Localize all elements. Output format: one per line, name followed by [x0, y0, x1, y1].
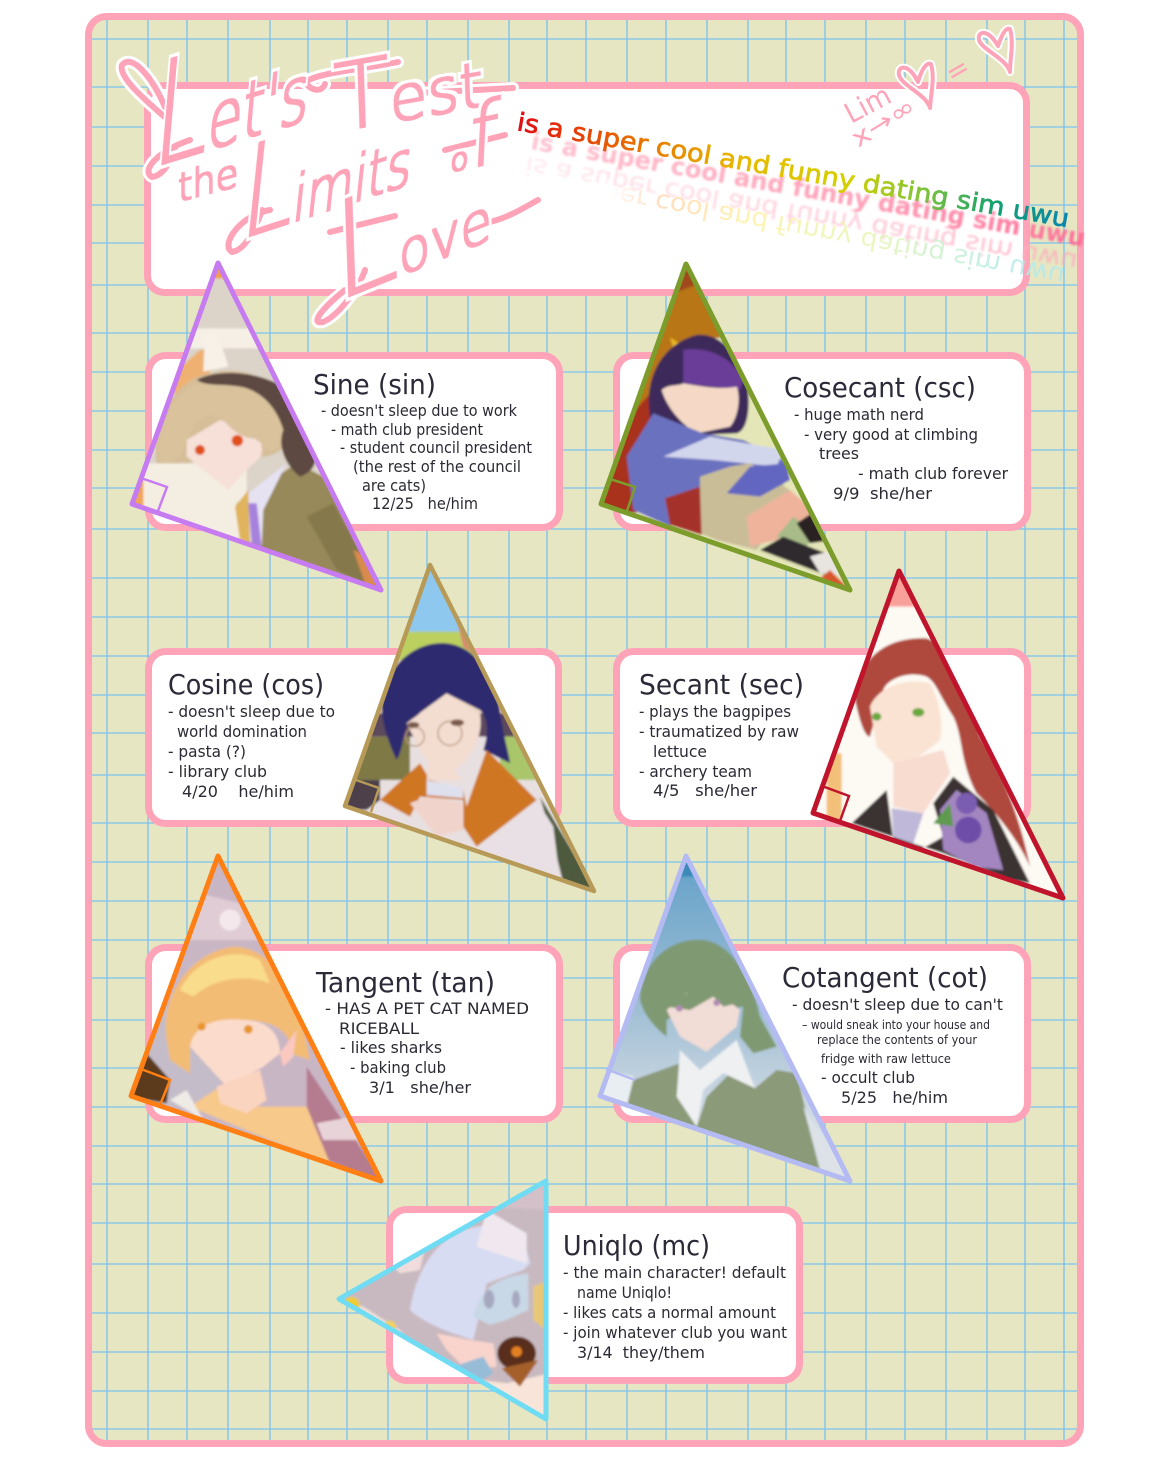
cosine text: - pasta (?) — [168, 742, 246, 761]
cotangent text: - doesn't sleep due to can't — [792, 995, 1003, 1014]
cotangent text: Cotangent (cot) — [782, 961, 988, 994]
card background — [148, 948, 560, 1120]
cotangent text: fridge with raw lettuce — [821, 1052, 951, 1066]
cosine text — [168, 668, 335, 801]
tangent text: - HAS A PET CAT NAMED — [325, 999, 529, 1018]
tangent text: Tangent (tan) — [315, 966, 495, 999]
title word: Let's: Let's — [147, 0, 319, 202]
portrait triangle: uniqlo — [336, 1178, 548, 1422]
cosine text: world domination — [177, 722, 307, 741]
secant text: Secant (sec) — [639, 668, 804, 701]
subtitle rainbow text: is a super cool and funny dating sim uwu — [515, 107, 1071, 233]
icon: heart left — [899, 64, 933, 108]
tangent text: - baking club — [350, 1058, 446, 1077]
cotangent text: - occult club — [821, 1068, 915, 1087]
card background — [616, 652, 1028, 824]
cotangent text: – would sneak into your house and — [802, 1018, 990, 1032]
sine text: - doesn't sleep due to work — [321, 401, 518, 420]
text: lim: Lim — [839, 79, 897, 130]
panel: cotangent — [590, 847, 1028, 1193]
text: x to infinity: x→∞ — [846, 91, 921, 153]
cosecant text: Cosecant (csc) — [784, 371, 976, 404]
portrait triangle: tangent — [128, 854, 384, 1184]
uniqlo text — [563, 1229, 787, 1362]
subtitle mirrored pink reflection: is a super cool and funny dating sim uwu — [523, 151, 1080, 277]
portrait triangle: cosine — [342, 562, 596, 894]
uniqlo text: 3/14 they/them — [577, 1343, 705, 1362]
title word: Love: Love — [331, 116, 493, 334]
sine text: Sine (sin) — [313, 368, 436, 401]
icon: heart right — [979, 29, 1012, 72]
panel: secant — [613, 568, 1066, 900]
title flourish — [122, 62, 538, 322]
tangent text — [315, 966, 529, 1097]
cosecant text: - huge math nerd — [794, 405, 924, 424]
cosine text: - doesn't sleep due to — [168, 702, 335, 721]
title word: the: the — [178, 150, 238, 212]
portrait triangle: cotangent — [598, 854, 852, 1184]
tangent text: RICEBALL — [339, 1019, 419, 1038]
secant text: - traumatized by raw — [639, 722, 799, 741]
panel: cosine — [145, 562, 596, 894]
tangent text: - likes sharks — [340, 1038, 442, 1057]
panel: uniqlo — [336, 1178, 803, 1422]
title word: of: of — [449, 83, 501, 193]
card background — [390, 1210, 800, 1380]
panel: sine — [120, 250, 560, 603]
cotangent text — [782, 961, 1003, 1107]
sine text: are cats) — [362, 476, 426, 495]
cotangent text: 5/25 he/him — [841, 1088, 948, 1107]
portrait triangle: sine — [130, 260, 384, 592]
subtitle pink shadow: is a super cool and funny dating sim uwu — [529, 126, 1087, 252]
sine text: - math club president — [331, 420, 483, 439]
secant text — [639, 668, 804, 800]
secant text: - archery team — [639, 762, 752, 781]
card background — [148, 356, 560, 528]
secant text: lettuce — [653, 742, 707, 761]
cosecant text: trees — [819, 444, 859, 463]
cosecant text: - math club forever — [858, 464, 1008, 483]
uniqlo text: Uniqlo (mc) — [563, 1229, 710, 1262]
sine text — [313, 368, 532, 513]
cosine text: 4/20 he/him — [182, 782, 294, 801]
uniqlo text: name Uniqlo! — [577, 1283, 672, 1302]
sine text: (the rest of the council — [353, 457, 521, 476]
text: equals: = — [939, 50, 976, 90]
tangent text: 3/1 she/her — [369, 1078, 471, 1097]
subtitle with reflections — [515, 107, 1087, 291]
secant text: 4/5 she/her — [653, 781, 757, 800]
portrait triangle: secant — [810, 568, 1066, 900]
card background — [148, 652, 558, 824]
cosecant text — [784, 371, 1008, 503]
panel: title banner — [148, 86, 1026, 292]
sine text: 12/25 he/him — [372, 494, 478, 513]
cotangent text: replace the contents of your — [817, 1033, 977, 1047]
card background — [616, 356, 1028, 528]
sine text: - student council president — [340, 438, 532, 457]
uniqlo text: - likes cats a normal amount — [563, 1303, 776, 1322]
limit equation doodle — [839, 29, 1012, 153]
uniqlo text: - join whatever club you want — [563, 1323, 787, 1342]
secant text: - plays the bagpipes — [639, 702, 791, 721]
cosine text: Cosine (cos) — [168, 668, 324, 701]
portrait triangle: cosecant — [598, 262, 852, 592]
title — [122, 0, 538, 334]
uniqlo text: - the main character! default — [563, 1263, 786, 1282]
subtitle mirrored rainbow reflection: is a super cool and funny dating sim uwu — [515, 162, 1067, 291]
cosecant text: - very good at climbing — [804, 425, 978, 444]
panel: tangent — [120, 840, 560, 1193]
cosecant text: 9/9 she/her — [833, 484, 932, 503]
panel: cosecant — [590, 250, 1028, 603]
title word: Limits: Limits — [235, 66, 422, 271]
title word: Test: Test — [332, 19, 484, 154]
card background — [616, 948, 1028, 1120]
cosine text: - library club — [168, 762, 267, 781]
